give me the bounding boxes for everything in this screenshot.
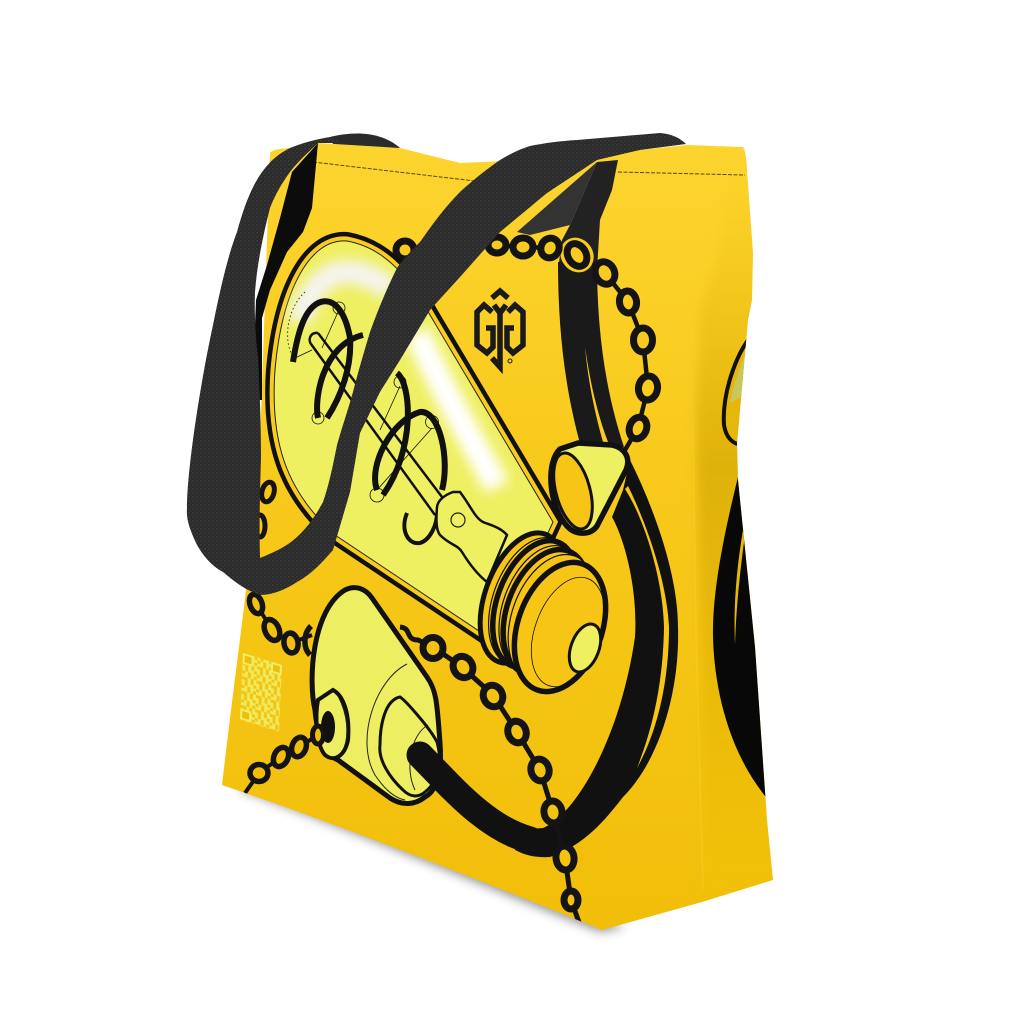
side panel shading — [694, 215, 773, 893]
chain: lower centre — [400, 627, 580, 925]
bulb stem — [436, 492, 507, 582]
bulb screw base — [478, 530, 608, 694]
wire end — [420, 755, 452, 788]
filament — [293, 301, 445, 543]
ground shadow — [240, 782, 625, 932]
carrying handle — [187, 133, 686, 595]
bulb glare top — [300, 272, 390, 322]
chain: left — [260, 480, 277, 540]
tote bag product illustration — [186, 133, 773, 938]
bag body — [222, 143, 773, 930]
back strap behind bag — [330, 134, 400, 160]
chain ring over plug — [312, 726, 324, 744]
white sliver at handle — [636, 141, 655, 152]
socket ellipse line — [367, 664, 407, 800]
chain: bottom left — [245, 735, 318, 793]
left port — [316, 690, 348, 758]
upper section of wire with strap tab stitching — [558, 160, 624, 447]
lower section of wire — [420, 460, 678, 857]
bulb glare long — [417, 333, 497, 487]
brand logo — [477, 291, 523, 367]
light bulb glass — [274, 241, 553, 643]
QR code — [240, 653, 282, 732]
chain: lower left — [247, 593, 312, 655]
side panel print: bulb fragment — [722, 339, 746, 446]
printed artwork on bag — [240, 150, 790, 925]
top stitching — [313, 162, 745, 181]
plug socket — [312, 588, 452, 804]
pull cord knob — [546, 443, 628, 533]
gusset seam — [693, 420, 703, 890]
chain: upper right — [396, 231, 659, 450]
inner print wire at left — [252, 143, 318, 400]
side panel print: black wire fragment — [713, 477, 770, 802]
strap tab — [517, 162, 597, 235]
dotted arc — [288, 292, 305, 355]
right port — [380, 697, 439, 796]
